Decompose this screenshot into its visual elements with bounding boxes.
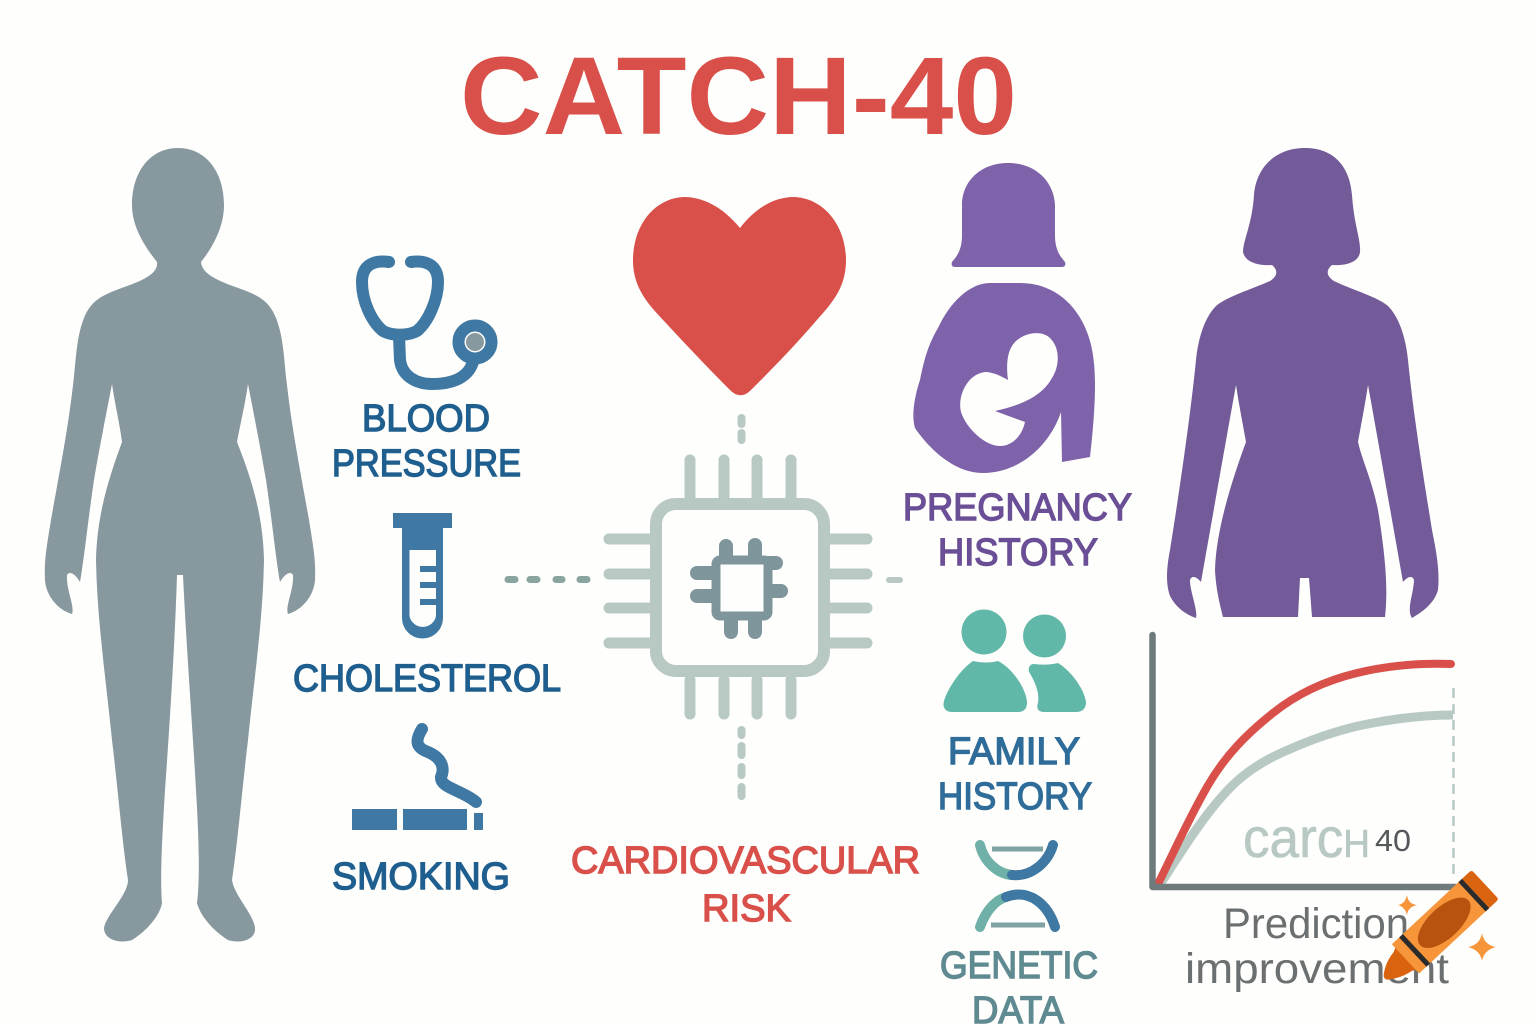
label: prediction improvement: Prediction (1223, 900, 1409, 948)
curve: CATCH-40 (1157, 664, 1451, 886)
icon: test tube (393, 513, 452, 638)
label: blood pressure: BLOOD (362, 398, 490, 440)
label: cardiovascular risk (571, 840, 920, 930)
icon: crayon with sparkles (1371, 870, 1499, 993)
icon: female body silhouette (1167, 148, 1439, 618)
label: blood pressure (332, 398, 521, 485)
chart label number: 40 (1375, 823, 1411, 858)
label: genetic data (940, 945, 1098, 1024)
connectors: dashed links (508, 418, 900, 796)
label: cardiovascular risk: CARDIOVASCULAR (571, 840, 920, 882)
icon: DNA (980, 845, 1055, 927)
icon: male body silhouette (45, 148, 315, 942)
label: pregnancy history: PREGNANCY (903, 487, 1132, 529)
curve: baseline (1159, 715, 1453, 886)
label: blood pressure: PRESSURE (332, 443, 521, 485)
axes (1152, 635, 1456, 887)
icon: stethoscope (362, 262, 492, 384)
dashed reference line (1452, 688, 1455, 880)
label: smoking: SMOKING (332, 856, 510, 898)
icon: cigarette (352, 729, 483, 830)
icon: pregnancy (913, 163, 1095, 473)
label: cardiovascular risk: RISK (702, 888, 791, 930)
chart: prediction improvement (1152, 635, 1456, 887)
label: cholesterol: CHOLESTEROL (293, 658, 561, 700)
label: prediction improvement: improvement (1185, 945, 1449, 993)
icon: family (943, 610, 1086, 712)
label: prediction improvement (1185, 900, 1449, 993)
panel: risk factors right (903, 163, 1132, 1024)
icon: heart (633, 197, 846, 395)
label: pregnancy history: HISTORY (938, 532, 1098, 574)
label: family history (938, 731, 1092, 818)
label: family history: FAMILY (948, 731, 1080, 773)
chart label: carcH (1243, 806, 1370, 869)
title: CATCH-40 (460, 35, 1017, 158)
label: family history: HISTORY (938, 776, 1092, 818)
chip core (697, 545, 781, 632)
panel: risk factors left (293, 262, 561, 898)
icon: AI chip (609, 460, 867, 714)
label: genetic data: GENETIC (940, 945, 1098, 987)
label: pregnancy history (903, 487, 1132, 574)
